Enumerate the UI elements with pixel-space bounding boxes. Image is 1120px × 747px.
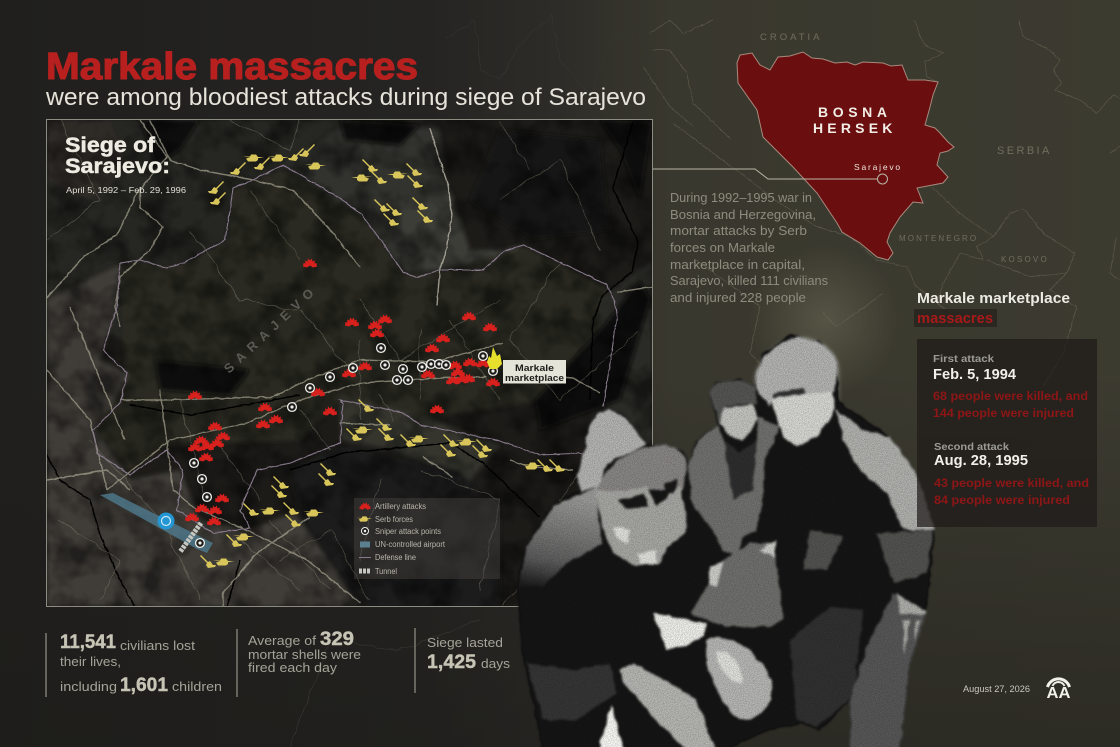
regional map outlines — [643, 20, 1120, 393]
country labels: KOSOVO — [1001, 255, 1049, 264]
siege dates: April 5, 1992 – Feb. 29, 1996 — [66, 185, 186, 195]
middle figure hair — [709, 380, 757, 425]
stat: siege duration — [414, 628, 511, 693]
photo: rescuers carrying a victim — [517, 335, 935, 747]
intro paragraph — [670, 191, 828, 305]
intro paragraph: During 1992–1995 war in — [670, 191, 812, 205]
legend: Artillery attacks — [375, 502, 426, 511]
map heading: Sarajevo: — [65, 155, 170, 178]
country labels — [760, 32, 1052, 264]
left figure hood — [577, 409, 647, 492]
country labels: SERBIA — [997, 145, 1052, 157]
legend: Serb forces — [375, 515, 413, 524]
silhouette — [517, 335, 935, 747]
panel: Markale marketplace massacres — [914, 291, 1097, 527]
right figure trousers — [850, 593, 927, 747]
lower left speckle — [527, 663, 617, 720]
legend: Sniper attack points — [375, 527, 441, 536]
left figure beret — [595, 445, 687, 497]
legend: Defense line — [375, 553, 416, 562]
panel heading: massacres — [917, 311, 993, 327]
stat: civilians killed: their lives, — [60, 654, 121, 669]
attacks box — [917, 339, 1097, 527]
hair halo — [755, 338, 839, 402]
second attack — [934, 442, 1089, 507]
tunnel — [180, 523, 201, 552]
victim legs — [690, 543, 783, 627]
right figure arm highlight — [837, 410, 935, 530]
right figure hair — [755, 338, 839, 407]
UN-controlled airport — [100, 493, 213, 553]
first attack: Feb. 5, 1994 — [933, 367, 1016, 383]
logo: AA: AA — [1046, 685, 1071, 702]
faint western coastline — [290, 15, 650, 747]
legend: Tunnel — [375, 567, 397, 576]
stat: mortar shells: Average of — [248, 633, 316, 648]
artillery attack markers — [185, 258, 500, 526]
logo: AA — [1046, 679, 1071, 702]
first attack — [933, 354, 1088, 420]
stat: civilians killed — [45, 632, 222, 697]
date: August 27, 2026 — [963, 684, 1030, 695]
UN icon — [158, 512, 174, 530]
rivers — [47, 122, 638, 607]
terrain — [47, 120, 652, 607]
roads — [47, 120, 652, 607]
Serb forces markers — [200, 144, 565, 568]
intro paragraph: mortar attacks by Serb — [670, 224, 807, 238]
stat: civilians killed: 1,601 — [120, 675, 168, 696]
hands — [653, 613, 707, 650]
first attack: First attack — [933, 354, 994, 365]
stat: civilians killed: civilians lost — [120, 638, 195, 653]
legend — [354, 498, 500, 579]
middle figure jacket — [688, 417, 780, 557]
stat: civilians killed: including — [60, 679, 117, 694]
stat: mortar shells — [236, 629, 361, 697]
country labels: CROATIA — [760, 32, 823, 43]
capital label: Sarajevo — [854, 162, 902, 172]
title: Markale massacres — [46, 46, 418, 88]
first attack: 68 people were killed, and — [933, 391, 1088, 403]
first attack: 144 people were injured — [933, 408, 1074, 420]
map heading — [65, 134, 186, 195]
left figure scarf and face — [595, 485, 687, 567]
victim head — [707, 637, 772, 720]
map of Sarajevo siege — [46, 120, 652, 607]
middle figure face — [720, 404, 758, 442]
stat: civilians killed: 11,541 — [60, 632, 116, 653]
second attack: Second attack — [934, 442, 1009, 453]
Markale marketplace label — [503, 360, 566, 384]
intro paragraph: marketplace in capital, — [670, 258, 805, 272]
stat: siege duration: Siege lasted — [427, 635, 503, 650]
intro paragraph: Sarajevo, killed 111 civilians — [670, 274, 828, 288]
intro paragraph: Bosnia and Herzegovina, — [670, 208, 816, 222]
district label: SARAJEVO — [221, 281, 321, 376]
map heading: Siege of — [65, 134, 156, 157]
second attack: 43 people were killed, and — [934, 478, 1089, 490]
country name: BOSNA — [818, 104, 892, 120]
photo body — [517, 335, 935, 747]
Markale marketplace label: Markale — [515, 363, 554, 374]
defense line — [93, 165, 617, 533]
country labels: MONTENEGRO — [899, 234, 978, 243]
locator map: Bosnia and Herzegovina — [737, 52, 954, 260]
stat: mortar shells: 329 — [320, 629, 354, 650]
panel heading — [914, 291, 1070, 327]
subtitle: were among bloodiest attacks during siege of Sarajevo — [45, 84, 646, 111]
stat: siege duration: 1,425 — [427, 652, 476, 673]
intro paragraph: and injured 228 people — [670, 291, 806, 305]
connector line to Sarajevo — [653, 169, 888, 184]
sniper attack markers — [190, 344, 497, 547]
panel heading: Markale marketplace — [917, 291, 1070, 307]
flame icon — [487, 347, 502, 369]
streets — [47, 120, 650, 607]
locator map: Bosnia and Herzegovina: HERSEK — [813, 120, 897, 136]
stat: mortar shells: mortar shells were — [248, 647, 361, 662]
title — [45, 46, 646, 111]
stat: siege duration: days — [481, 656, 511, 671]
second attack: Aug. 28, 1995 — [934, 453, 1028, 469]
second attack: 84 people were injured — [934, 495, 1070, 507]
right figure face — [771, 392, 835, 447]
stat: civilians killed: children — [172, 679, 222, 694]
intro paragraph: forces on Markale — [670, 241, 775, 255]
legend: UN-controlled airport — [375, 540, 446, 549]
stat: mortar shells: fired each day — [248, 660, 338, 675]
left figure shoulder — [518, 487, 602, 587]
Markale marketplace label: marketplace — [505, 373, 564, 384]
pale trousers — [620, 663, 717, 747]
